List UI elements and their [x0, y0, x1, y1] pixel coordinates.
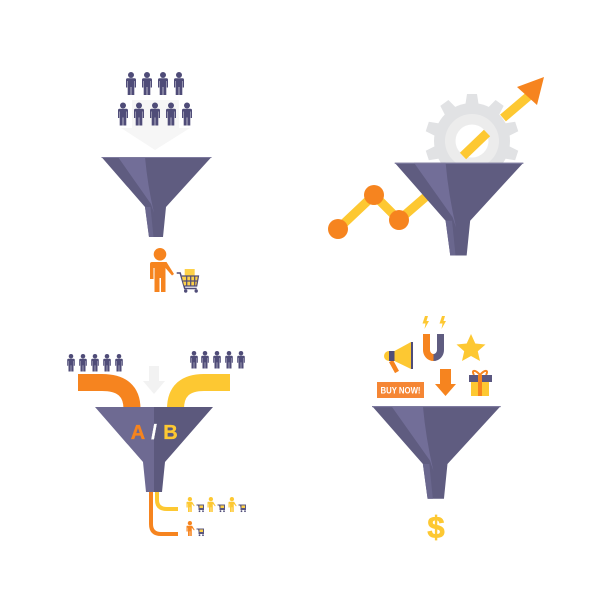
- yellow output pipe: [157, 492, 178, 509]
- icon: star: [456, 334, 486, 361]
- yellow pipe: [176, 382, 230, 409]
- label A / B: B: [163, 422, 178, 444]
- label A / B: [131, 422, 178, 444]
- orange output pipe: [151, 492, 178, 534]
- icon: down arrow: [435, 369, 456, 396]
- dollar sign: $: [427, 510, 445, 544]
- panel: A/B test funnel: [67, 351, 246, 536]
- icon: gift: [469, 371, 492, 396]
- panel: marketing funnel to dollars: [372, 316, 501, 544]
- yellow buyers: [186, 497, 246, 512]
- people right group: [190, 351, 245, 368]
- funnel: [372, 406, 501, 499]
- pale down arrow: [121, 100, 190, 150]
- people crowd top row: [126, 72, 184, 95]
- orange pipe: [78, 382, 132, 409]
- shopping cart: [177, 269, 198, 293]
- funnel: [95, 407, 213, 492]
- chart points: [328, 185, 409, 239]
- label A / B: A: [131, 422, 145, 444]
- icon: lightning bolts: [422, 316, 446, 329]
- growth line: [338, 95, 530, 229]
- icon: megaphone: [384, 342, 413, 372]
- icon: magnet: [426, 334, 440, 358]
- funnel: [395, 163, 523, 256]
- orange buyer: [150, 248, 174, 292]
- people crowd bottom row: [118, 102, 192, 126]
- gear: [425, 94, 519, 179]
- pale arrow: [143, 366, 165, 394]
- button: buy now: BUY NOW!: [380, 386, 420, 397]
- people left group: [67, 354, 123, 371]
- panel: funnel with gear and growth arrow: [328, 77, 544, 256]
- orange buyer: [186, 521, 204, 536]
- arrow head: [517, 77, 544, 105]
- button: buy now: [377, 382, 424, 398]
- label A / B: /: [151, 422, 157, 444]
- funnel: [102, 157, 212, 237]
- panel: funnel with crowd and one buyer: [102, 72, 212, 293]
